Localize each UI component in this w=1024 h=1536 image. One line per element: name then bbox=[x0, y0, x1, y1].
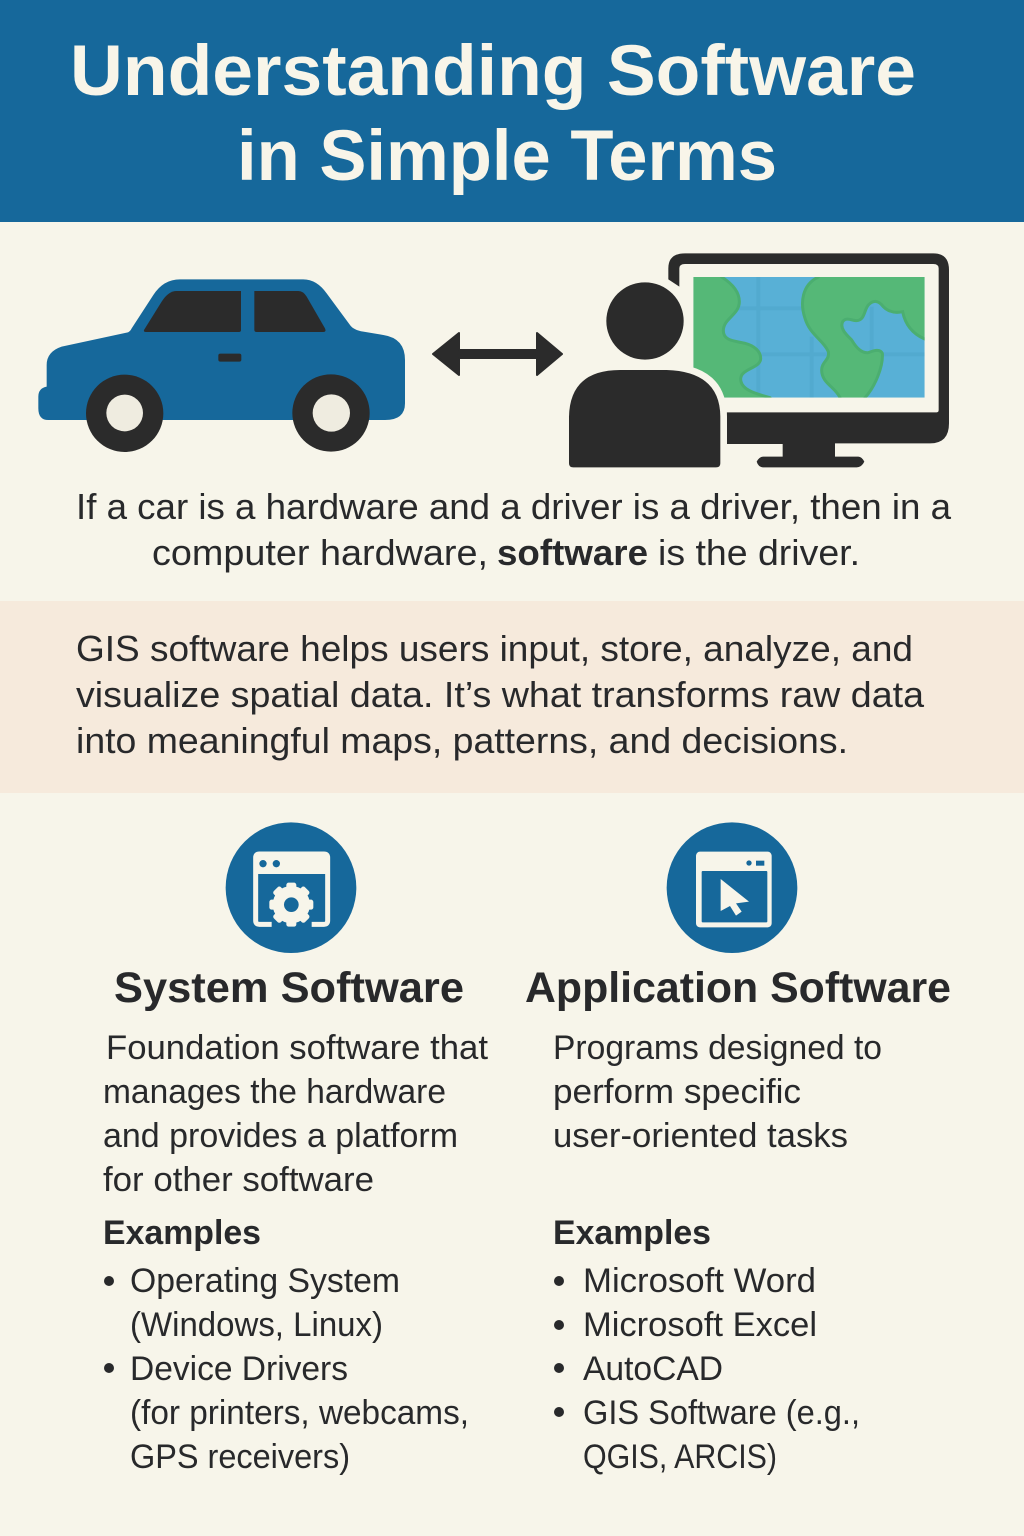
examples list: system software: Operating System bbox=[130, 1262, 400, 1300]
examples list: application software: Microsoft Excel bbox=[583, 1306, 817, 1344]
icon: window with cursor bbox=[667, 822, 797, 953]
examples heading: application software: Examples bbox=[553, 1214, 711, 1252]
panel: application software bbox=[525, 822, 951, 1476]
person bbox=[562, 282, 727, 473]
heading: system software: System Software bbox=[114, 964, 464, 1012]
panel: GIS software definition: into meaningful maps, patterns, and decisions. bbox=[76, 720, 848, 761]
examples list: system software: Device Drivers bbox=[130, 1350, 348, 1388]
icon: car bbox=[38, 279, 405, 452]
description: application software bbox=[553, 1029, 882, 1155]
examples heading: system software: Examples bbox=[103, 1214, 261, 1252]
analogy text: If a car is a hardware and a driver is a driver, then in a bbox=[76, 486, 952, 527]
description: system software: manages the hardware bbox=[103, 1073, 446, 1111]
title bbox=[70, 32, 916, 196]
icon: person at monitor with map bbox=[562, 253, 949, 473]
panel: system software bbox=[103, 822, 489, 1476]
examples list: application software: Microsoft Word bbox=[583, 1262, 816, 1300]
panel: GIS software definition bbox=[0, 601, 1024, 793]
examples list: system software: (for printers, webcams, bbox=[130, 1394, 469, 1432]
examples list: application software: QGIS, ARCIS) bbox=[583, 1438, 777, 1476]
analogy text: computer hardware, bbox=[152, 532, 488, 573]
analogy text: software bbox=[497, 532, 648, 573]
description: application software: perform specific bbox=[553, 1073, 801, 1111]
examples list: system software bbox=[104, 1262, 469, 1476]
examples list: application software bbox=[554, 1262, 860, 1476]
analogy text: is the driver. bbox=[658, 532, 860, 573]
description: system software: and provides a platform bbox=[103, 1117, 458, 1155]
panel: GIS software definition: visualize spatial data. It’s what transforms raw data bbox=[76, 674, 925, 715]
examples list: application software: AutoCAD bbox=[583, 1350, 723, 1388]
icon: window with gear bbox=[226, 822, 356, 953]
description: system software: Foundation software that bbox=[106, 1029, 489, 1067]
monitor bbox=[668, 253, 949, 467]
description: system software bbox=[103, 1029, 489, 1199]
header banner bbox=[0, 0, 1024, 222]
analogy text bbox=[76, 486, 952, 573]
description: application software: user-oriented tasks bbox=[553, 1117, 848, 1155]
description: system software: for other software bbox=[103, 1161, 374, 1199]
panel: GIS software definition: GIS software helps users input, store, analyze, and bbox=[76, 628, 913, 669]
examples list: application software: GIS Software (e.g., bbox=[583, 1394, 860, 1432]
heading: application software: Application Software bbox=[525, 964, 951, 1012]
arrow: double-headed bbox=[433, 333, 562, 375]
examples list: system software: GPS receivers) bbox=[130, 1438, 350, 1476]
map bbox=[692, 276, 926, 399]
title: in Simple Terms bbox=[237, 117, 777, 196]
examples list: system software: (Windows, Linux) bbox=[130, 1306, 383, 1344]
description: application software: Programs designed to bbox=[553, 1029, 882, 1067]
title: Understanding Software bbox=[70, 32, 916, 111]
